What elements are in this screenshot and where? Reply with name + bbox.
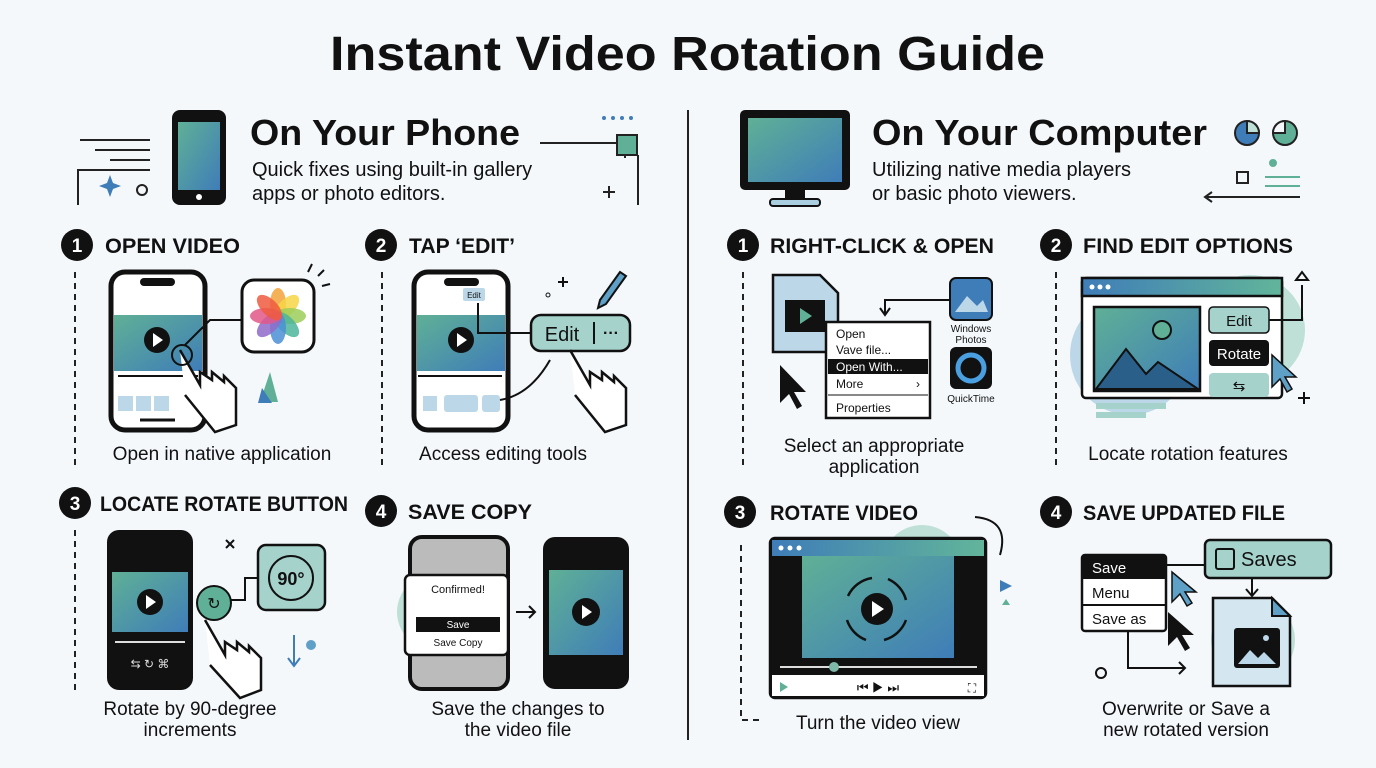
- file icon: [1213, 598, 1290, 686]
- panel: phone step 4: [365, 495, 629, 741]
- panel: computer step 2: Locate rotation features: [1088, 444, 1288, 465]
- panel: phone step 2: [365, 229, 630, 470]
- decoration left: [78, 140, 150, 205]
- video player: ⛶: [967, 681, 977, 695]
- panel: phone step 4: 4: [376, 502, 387, 523]
- phone mockup: [107, 530, 193, 690]
- panel: computer step 2: [1040, 229, 1310, 470]
- grey phone with dialog: Confirmed!: [431, 584, 485, 596]
- panel: computer step 1: [727, 229, 995, 478]
- decoration right: [540, 135, 638, 205]
- panel: phone step 1: OPEN VIDEO: [105, 235, 240, 258]
- file icon: [773, 275, 838, 352]
- button: edit: [531, 315, 630, 351]
- panel: computer step 3: 3: [735, 503, 745, 524]
- panel: computer step 4: SAVE UPDATED FILE: [1083, 502, 1285, 525]
- menu: Menu: [1092, 585, 1130, 602]
- context menu: More: [836, 377, 864, 391]
- panel: computer step 3: [724, 496, 1012, 734]
- panel: computer step 1: 1: [738, 236, 749, 257]
- panel: phone step 1: 1: [72, 236, 83, 257]
- panel: computer step 1: application: [829, 457, 919, 478]
- panel: computer step 4: [1040, 496, 1331, 741]
- 90 degree box: 90°: [277, 569, 305, 589]
- panel: phone step 1: Open in native application: [113, 444, 331, 465]
- icon: monitor: [740, 110, 850, 206]
- rotate circle: [197, 586, 231, 620]
- icon: windows photos: Photos: [955, 335, 987, 346]
- panel: computer step 3: ROTATE VIDEO: [770, 502, 918, 525]
- phone mockup: [414, 272, 508, 430]
- menu: Save: [1092, 560, 1126, 577]
- context menu: Open With...: [836, 360, 903, 374]
- icon: phone: [172, 110, 226, 205]
- panel: computer step 3: Turn the video view: [796, 713, 960, 734]
- panel: phone step 4: SAVE COPY: [408, 501, 532, 524]
- menu: [1082, 555, 1166, 631]
- panel: phone step 4: the video file: [465, 720, 571, 741]
- 90 degree box: [258, 545, 325, 610]
- phone mockup: ⇆ ↻ ⌘: [131, 657, 169, 671]
- grey phone with dialog: Save Copy: [434, 638, 482, 649]
- video player: ⏮ ▶ ⏭: [857, 680, 899, 695]
- phone mockup: Edit: [467, 291, 482, 300]
- panel: phone step 3: LOCATE ROTATE BUTTON: [100, 493, 348, 516]
- menu: Save as: [1092, 611, 1146, 628]
- grey phone with dialog: [405, 537, 508, 689]
- panel: phone step 3: increments: [144, 720, 236, 741]
- icon: photos app: [242, 280, 314, 352]
- header: on your phone: Quick fixes using built-in gallery: [252, 159, 532, 181]
- context menu: Properties: [836, 401, 891, 415]
- icon: hand: [180, 350, 236, 432]
- phone mockup: [111, 272, 205, 430]
- icon: windows photos: Windows: [951, 324, 991, 335]
- panel: computer step 2: FIND EDIT OPTIONS: [1083, 235, 1293, 258]
- header: on your phone: [78, 110, 638, 205]
- icon: quicktime: [947, 347, 995, 405]
- saves button: Saves: [1241, 549, 1297, 571]
- panel: phone step 1: [61, 229, 331, 465]
- panel: phone step 2: TAP ‘EDIT’: [409, 235, 515, 258]
- panel: computer step 1: RIGHT-CLICK & OPEN: [770, 235, 994, 258]
- panel: phone step 3: Rotate by 90-degree: [103, 699, 277, 720]
- context menu: ›: [916, 377, 920, 391]
- grey phone with dialog: Save: [447, 620, 470, 631]
- header: on your computer: [740, 110, 1300, 206]
- header: on your phone: apps or photo editors.: [252, 183, 445, 205]
- header: on your computer: or basic photo viewers.: [872, 183, 1077, 205]
- context menu: [826, 322, 930, 418]
- panel: computer step 2: ⇆: [1233, 378, 1245, 395]
- black phone: [543, 537, 629, 689]
- panel: computer step 4: 4: [1051, 503, 1062, 524]
- header: on your phone: On Your Phone: [250, 112, 520, 153]
- panel: computer step 2: Edit: [1226, 313, 1253, 330]
- panel: computer step 4: new rotated version: [1103, 720, 1269, 741]
- button: edit: ···: [603, 325, 619, 342]
- saves button: [1205, 540, 1331, 578]
- header: on your computer: On Your Computer: [872, 112, 1207, 153]
- header: on your computer: Utilizing native media players: [872, 159, 1131, 181]
- panel: phone step 2: Access editing tools: [419, 444, 587, 465]
- context menu: Vave file...: [836, 343, 891, 357]
- panel: phone step 3: [59, 487, 348, 741]
- panel: phone step 2: 2: [376, 236, 386, 257]
- context menu: Open: [836, 327, 865, 341]
- panel: phone step 3: ↻: [207, 596, 221, 613]
- title: Instant Video Rotation Guide: [330, 28, 1045, 81]
- icon: windows photos: [950, 278, 992, 346]
- panel: computer step 1: Select an appropriate: [784, 436, 964, 457]
- window: [1082, 278, 1282, 398]
- panel: computer step 4: Overwrite or Save a: [1102, 699, 1270, 720]
- panel: computer step 2: Rotate: [1217, 346, 1261, 363]
- video player: [770, 538, 986, 698]
- panel: phone step 4: Save the changes to: [431, 699, 605, 720]
- panel: phone step 3: 3: [70, 494, 80, 515]
- icon: quicktime: QuickTime: [947, 394, 995, 405]
- panel: computer step 2: 2: [1051, 236, 1061, 257]
- button: edit: Edit: [545, 324, 580, 346]
